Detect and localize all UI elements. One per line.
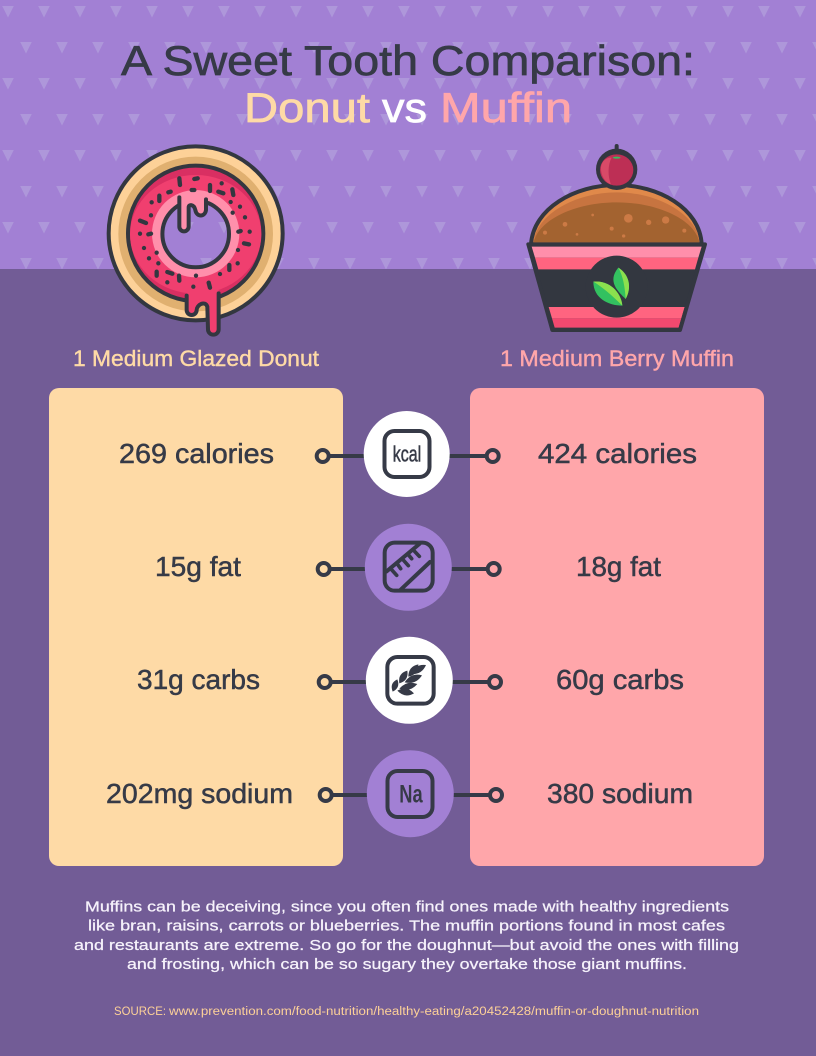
- icon: sodium: [367, 750, 454, 837]
- title: Muffin: [440, 84, 572, 131]
- muffin cup: [528, 244, 705, 330]
- icon: donut: [109, 146, 283, 335]
- donut fat: 15g fat: [155, 551, 241, 582]
- icon: kcal: kcal: [393, 442, 421, 466]
- connector: fat: [318, 563, 500, 575]
- icon: muffin: [528, 146, 705, 330]
- paragraph: and frosting, which can be so sugary they overtake those giant muffins.: [127, 957, 687, 973]
- paragraph: like bran, raisins, carrots or blueberries. The muffin portions found in most cafes: [88, 918, 725, 934]
- title: Donut: [244, 84, 370, 131]
- muffin calories: 424 calories: [538, 438, 697, 469]
- icon: ruler: [365, 524, 452, 611]
- paragraph: Muffins can be deceiving, since you often find ones made with healthy ingredients: [85, 900, 729, 916]
- title: A Sweet Tooth Comparison:: [121, 37, 695, 84]
- muffin top: [531, 185, 702, 244]
- paragraph: and restaurants are extreme. So go for the doughnut—but avoid the ones with filling: [74, 938, 739, 954]
- paragraph: [74, 900, 739, 973]
- muffin sodium: 380 sodium: [547, 778, 693, 809]
- muffin fat: 18g fat: [576, 551, 661, 582]
- connector: carbs: [319, 676, 501, 688]
- icon: leaves: [593, 268, 629, 306]
- donut sodium: 202mg sodium: [106, 778, 293, 809]
- source: SOURCE:: [114, 1006, 166, 1018]
- panel: muffin: [470, 388, 764, 866]
- muffin carbs: 60g carbs: [556, 664, 684, 695]
- donut calories: 269 calories: [119, 438, 274, 469]
- panel: donut: [49, 388, 343, 866]
- label: muffin: 1 Medium Berry Muffin: [500, 346, 734, 371]
- connector: sodium: [320, 789, 502, 801]
- title: vs: [382, 84, 427, 131]
- source: www.prevention.com/food-nutrition/healthy-eating/a20452428/muffin-or-doughnut-nutrition: [168, 1006, 699, 1018]
- icon: sodium: Na: [399, 781, 423, 809]
- icon: kcal: [364, 411, 450, 497]
- title: [121, 37, 695, 131]
- icon: cherry: [596, 146, 637, 190]
- connector: calories: [317, 450, 499, 462]
- icon: wheat: [366, 637, 453, 724]
- label: donut: 1 Medium Glazed Donut: [73, 346, 319, 371]
- donut carbs: 31g carbs: [137, 664, 260, 695]
